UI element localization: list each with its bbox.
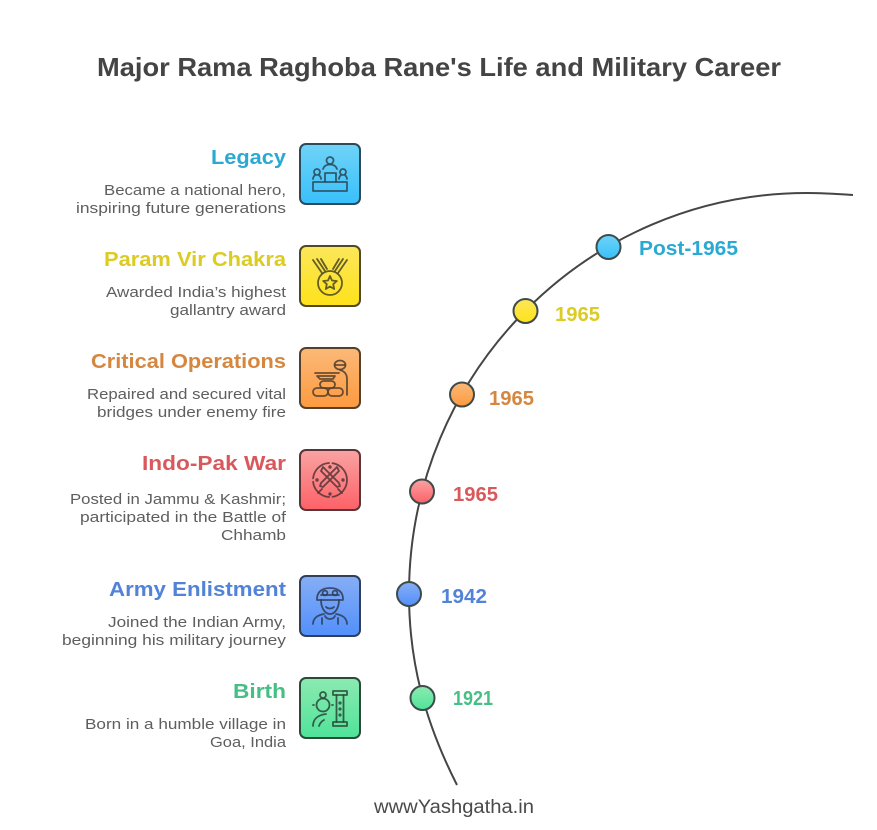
timeline curve (409, 193, 853, 785)
text: Legacy description (76, 183, 286, 217)
heading: Birth: Birth (233, 680, 286, 703)
text: Critical Operations description: bridges under enemy fire (97, 405, 286, 421)
icon: person beside monument (300, 678, 360, 738)
timeline marker: 1965 yellow: 1965 (555, 304, 600, 326)
timeline marker: 1921: 1921 (453, 688, 493, 710)
timeline marker: 1965 orange: 1965 (489, 388, 534, 410)
panel: Critical Operations (87, 348, 360, 421)
timeline marker: 1942 (397, 582, 487, 608)
timeline marker: Post-1965 (596, 235, 738, 260)
text: Army Enlistment description: beginning his military journey (62, 633, 287, 649)
text: Indo-Pak War description (70, 492, 287, 544)
icon: soldier with helmet (300, 576, 360, 636)
timeline marker: 1965 red: 1965 (453, 484, 498, 506)
text: Birth description (85, 717, 287, 751)
panel: Army Enlistment (62, 576, 360, 649)
text: Indo-Pak War description: participated in the Battle of (80, 510, 287, 526)
timeline marker: 1965 red (410, 480, 498, 506)
footer: website: wwwYashgatha.in (373, 797, 534, 818)
text: Legacy description: inspiring future generations (76, 201, 286, 217)
heading: Param Vir Chakra: Param Vir Chakra (104, 248, 287, 271)
icon: crossed swords (300, 450, 360, 510)
timeline marker: 1921 (410, 686, 493, 710)
panel: Birth (85, 678, 360, 751)
text: Birth description: Born in a humble village in (85, 717, 286, 733)
timeline marker: 1965 yellow (514, 299, 600, 326)
title: Major Rama Raghoba Rane's Life and Military Career (97, 52, 781, 82)
text: Army Enlistment description (62, 615, 287, 649)
text: Param Vir Chakra description: Awarded India’s highest (106, 285, 286, 301)
heading: Indo-Pak War: Indo-Pak War (142, 452, 286, 475)
panel: Param Vir Chakra (104, 246, 360, 319)
text: Army Enlistment description: Joined the Indian Army, (108, 615, 286, 631)
heading: Critical Operations: Critical Operations (91, 350, 286, 373)
timeline marker: Post-1965: Post-1965 (639, 238, 738, 260)
text: Critical Operations description: Repaired and secured vital (87, 387, 286, 403)
icon: people on podium (300, 144, 360, 204)
text: Critical Operations description (87, 387, 286, 421)
timeline marker: 1965 orange (450, 382, 534, 410)
panel: Indo-Pak War (70, 450, 360, 544)
timeline marker: 1942: 1942 (441, 586, 487, 608)
heading: Army Enlistment: Army Enlistment (109, 578, 286, 601)
text: Indo-Pak War description: Posted in Jammu & Kashmir; (70, 492, 286, 508)
icon: medal (300, 246, 360, 306)
icon: soldier behind sandbags (300, 348, 360, 408)
text: Indo-Pak War description: Chhamb (221, 528, 286, 544)
text: Legacy description: Became a national hero, (104, 183, 286, 199)
panel: Legacy (76, 144, 360, 217)
text: Param Vir Chakra description: gallantry award (170, 303, 286, 319)
text: Birth description: Goa, India (210, 735, 287, 751)
text: Param Vir Chakra description (106, 285, 286, 319)
heading: Legacy: Legacy (211, 146, 287, 169)
